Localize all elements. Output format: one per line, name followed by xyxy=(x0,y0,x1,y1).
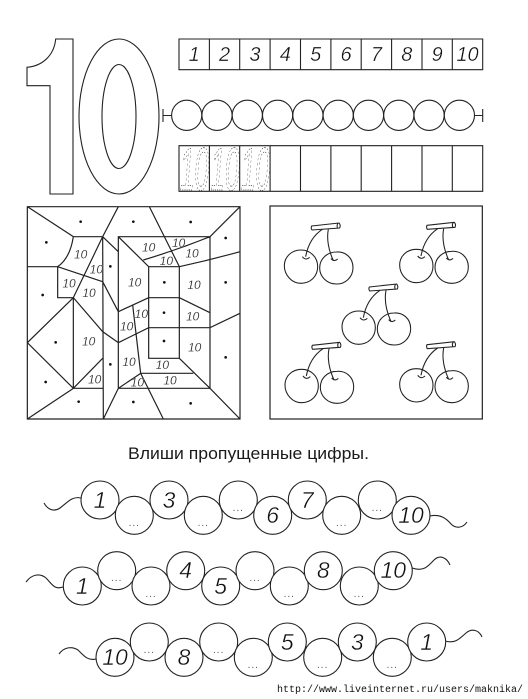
number chain row 2: 10 xyxy=(381,557,406,583)
mosaic numbers: 10 xyxy=(163,374,177,388)
mosaic numbers: 10 xyxy=(156,358,169,372)
heading: Влиши пропущенные цифры. xyxy=(128,445,369,463)
source url: http://www.liveinternet.ru/users/maknika/ xyxy=(277,684,523,696)
number chain row 2 xyxy=(26,552,450,605)
cherry pair 1 xyxy=(284,223,353,284)
number chain row 3 xyxy=(59,623,482,676)
bead string of ten circles xyxy=(163,100,483,130)
mosaic numbers: 10 xyxy=(128,276,142,290)
colour-by-number mosaic xyxy=(27,207,240,419)
number chain row 2: 1 xyxy=(76,573,89,599)
number chain row 1: 7 xyxy=(301,487,315,513)
tracing strip with dashed tens: 10 xyxy=(241,136,270,203)
mosaic numbers: 10 xyxy=(135,307,148,321)
number chain row 3: ... xyxy=(387,660,398,671)
big number 10 xyxy=(27,39,159,194)
number chain row 1: ... xyxy=(372,503,383,514)
number chain row 2: ... xyxy=(145,589,157,600)
mosaic numbers: 10 xyxy=(188,341,202,355)
number strip 1 to 10 xyxy=(179,39,483,70)
tracing strip with dashed tens: 10 xyxy=(210,136,240,203)
number strip 1 to 10: 3 xyxy=(249,44,260,66)
mosaic numbers: 10 xyxy=(62,277,76,291)
number chain row 2: ... xyxy=(354,589,365,600)
mosaic numbers: 10 xyxy=(122,355,136,369)
number chain row 1: 1 xyxy=(94,487,106,513)
number chain row 2: ... xyxy=(284,589,295,600)
number strip 1 to 10: 5 xyxy=(310,44,322,66)
tracing strip with dashed tens xyxy=(179,136,483,203)
number chain row 3: 8 xyxy=(178,644,191,670)
mosaic numbers: 10 xyxy=(131,376,144,390)
number chain row 3: ... xyxy=(213,645,224,656)
cherry pair 5 xyxy=(400,342,468,403)
number chain row 2: 8 xyxy=(317,557,330,583)
mosaic numbers: 10 xyxy=(172,236,186,250)
number chain row 3: ... xyxy=(317,660,328,671)
mosaic numbers: 10 xyxy=(185,247,199,261)
number strip 1 to 10: 1 xyxy=(189,44,200,66)
cherry pair 3 xyxy=(342,284,411,345)
number chain row 1: 6 xyxy=(266,502,279,528)
number chain row 3: ... xyxy=(144,645,155,656)
tracing strip with dashed tens: 10 xyxy=(180,136,209,203)
mosaic numbers: 10 xyxy=(82,286,96,300)
panel: cherries xyxy=(270,206,482,419)
number chain row 2: 4 xyxy=(179,557,192,583)
mosaic numbers: 10 xyxy=(186,310,200,324)
number chain row 1: ... xyxy=(129,518,140,529)
mosaic numbers: 10 xyxy=(74,247,88,261)
mosaic numbers: 10 xyxy=(82,335,96,349)
number chain row 1: ... xyxy=(198,518,209,529)
number chain row 1: 3 xyxy=(163,487,176,513)
number chain row 1: ... xyxy=(336,518,347,529)
number strip 1 to 10: 10 xyxy=(456,44,479,66)
number chain row 2: 5 xyxy=(214,573,227,599)
mosaic numbers: 10 xyxy=(88,372,102,386)
number chain row 2: ... xyxy=(111,573,122,584)
mosaic numbers xyxy=(62,236,202,390)
number chain row 3: 5 xyxy=(281,629,294,655)
cherry pair 4 xyxy=(285,342,354,403)
mosaic numbers: 10 xyxy=(187,278,201,292)
number chain row 2: ... xyxy=(249,573,261,584)
number strip 1 to 10: 6 xyxy=(340,44,352,66)
number chain row 3: 3 xyxy=(351,629,364,655)
mosaic dots xyxy=(41,220,227,405)
number chain row 1: 10 xyxy=(398,502,424,528)
mosaic numbers: 10 xyxy=(120,319,134,333)
number strip 1 to 10: 7 xyxy=(371,44,383,66)
mosaic numbers: 10 xyxy=(142,240,156,254)
number strip 1 to 10: 2 xyxy=(218,44,230,66)
number chain row 3: 10 xyxy=(102,644,128,670)
number strip 1 to 10: 8 xyxy=(401,44,412,66)
number chain row 1 xyxy=(44,481,467,534)
cherry pair 2 xyxy=(400,222,468,283)
number strip 1 to 10: 4 xyxy=(280,44,291,66)
number chain row 3: 1 xyxy=(420,629,433,655)
mosaic numbers: 10 xyxy=(160,254,173,268)
number strip 1 to 10: 9 xyxy=(432,44,443,66)
mosaic numbers: 10 xyxy=(90,263,103,277)
number chain row 3: ... xyxy=(248,660,259,671)
number chain row 1: ... xyxy=(233,503,244,514)
